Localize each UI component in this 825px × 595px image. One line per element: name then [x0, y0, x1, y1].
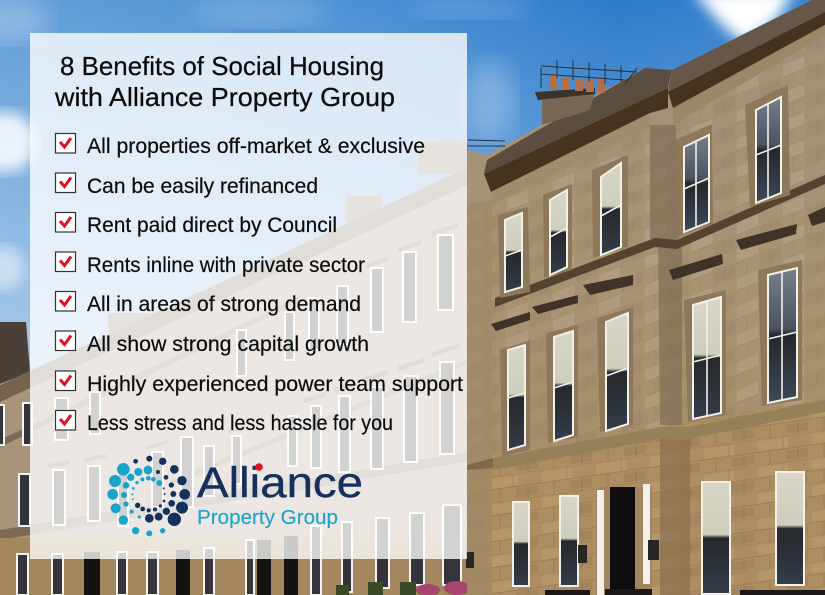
lower storey warm stone [467, 400, 825, 595]
lanterns [466, 540, 659, 568]
planters [336, 582, 416, 595]
main windows upper rows [505, 97, 797, 450]
item 4: Rents inline with private sector [87, 254, 365, 277]
window pediments [491, 207, 825, 331]
title: 8 Benefits of Social Housing [60, 51, 384, 81]
left terrace facade [0, 160, 490, 595]
item 8: Less stress and less hassle for you [87, 412, 393, 435]
left terrace doors [84, 536, 298, 595]
ashlar texture [467, 33, 825, 470]
main building facade [467, 0, 825, 595]
logo red dot [255, 463, 263, 471]
item 1: All properties off-market & exclusive [87, 135, 425, 158]
chimney stack [468, 60, 637, 146]
checklist [56, 134, 463, 435]
logo: Alliance Property Group [107, 456, 363, 536]
left terrace pediments [48, 223, 460, 468]
top cornice dark band [484, 0, 825, 204]
main window frames [498, 85, 802, 456]
logo wordmark: Alliance [197, 459, 363, 507]
item 3: Rent paid direct by Council [87, 214, 337, 237]
logo mark: dotted circle [107, 456, 190, 536]
item 6: All show strong capital growth [87, 333, 369, 356]
far roof at left [0, 322, 30, 384]
translucent white panel [30, 33, 467, 559]
corner pier shading [650, 125, 682, 425]
railings [545, 589, 825, 595]
title [54, 51, 395, 112]
item 2: Can be easily refinanced [87, 175, 318, 198]
window glazing bars [505, 104, 797, 416]
clouds [0, 0, 795, 290]
left terrace belts [0, 296, 490, 540]
title: with Alliance Property Group [54, 82, 395, 112]
rear chimneys [108, 142, 468, 337]
main windows ground floor [513, 472, 804, 594]
item 5: All in areas of strong demand [87, 293, 361, 316]
entrance door [596, 484, 652, 595]
logo tagline: Property Group [197, 507, 338, 529]
left terrace windows [0, 235, 461, 595]
string courses [467, 175, 825, 470]
item 7: Highly experienced power team support [87, 373, 463, 396]
